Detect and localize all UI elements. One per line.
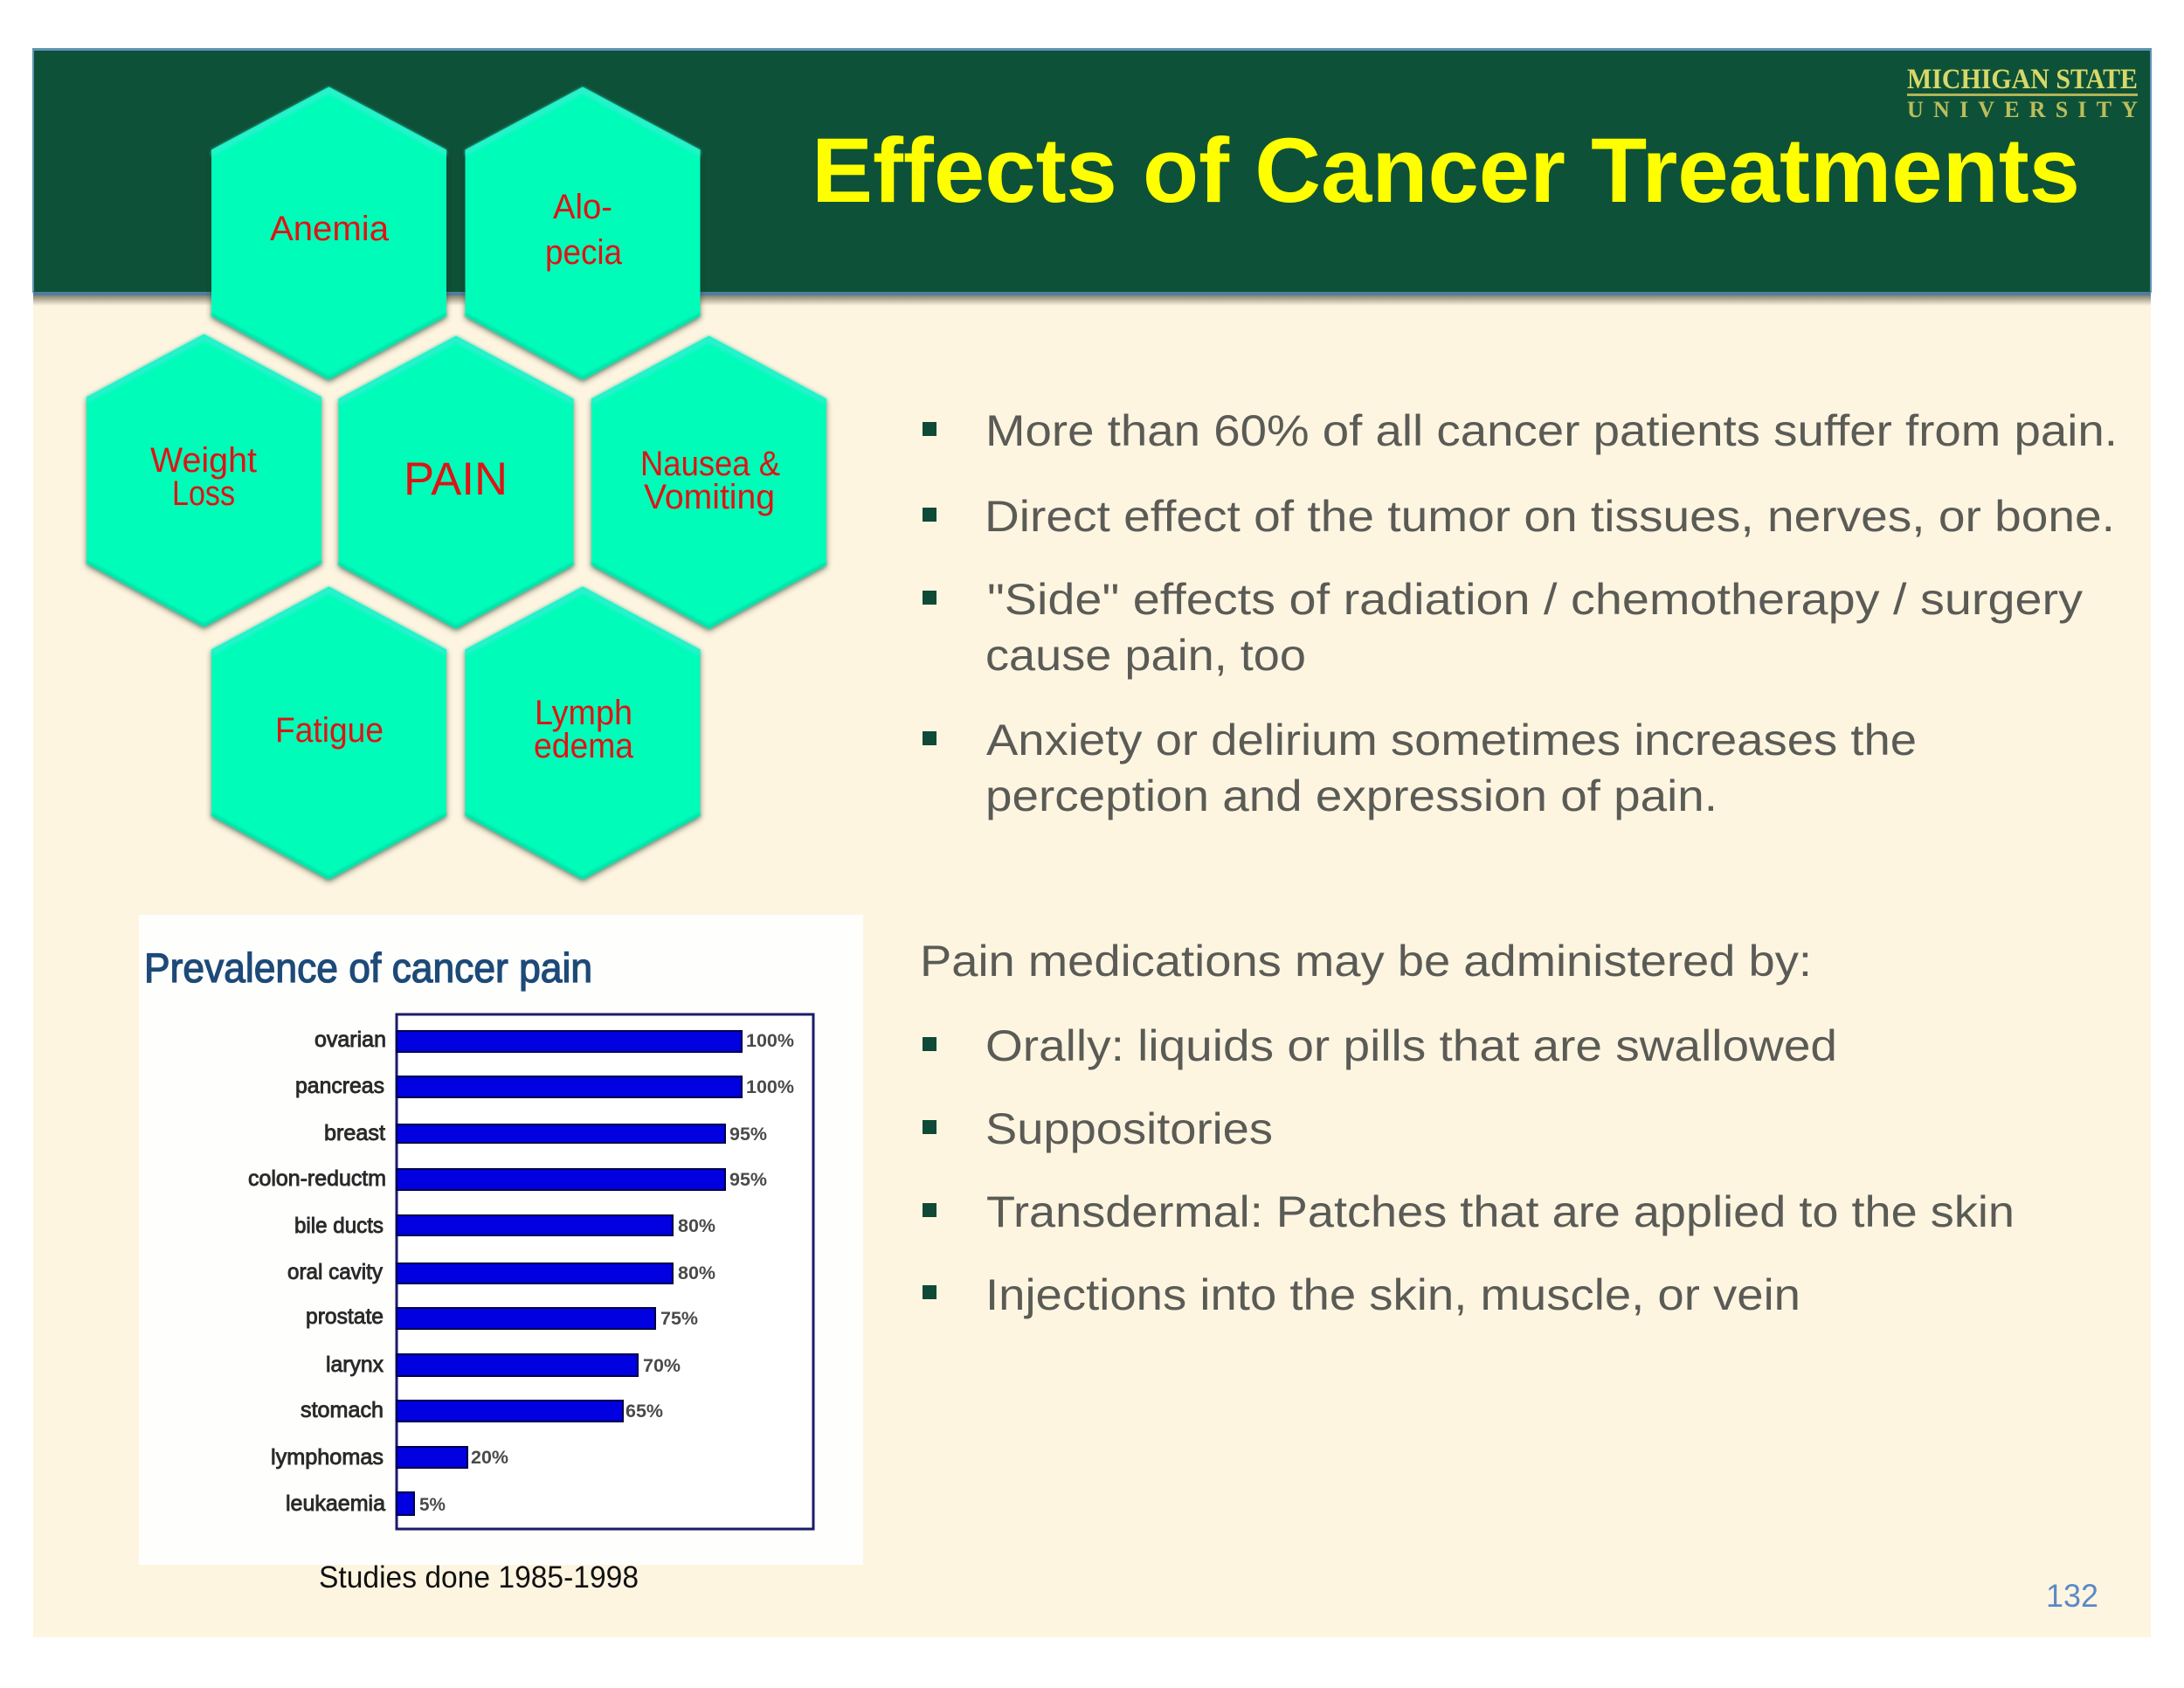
value labels: 100% — [746, 1077, 794, 1097]
value labels: 95% — [729, 1124, 767, 1145]
hexagon: Anemia — [211, 87, 446, 379]
category labels: colon-reductm — [248, 1166, 386, 1191]
medications heading: Pain medications may be administered by: — [920, 937, 1812, 986]
hexagon cluster — [86, 87, 826, 879]
bullet: side effects — [923, 575, 2083, 680]
category labels: bile ducts — [294, 1214, 384, 1238]
value labels: 5% — [419, 1495, 446, 1515]
value labels: 20% — [471, 1448, 508, 1468]
hexagon: Alopecia — [465, 87, 701, 379]
hexagon: Nausea and Vomiting — [591, 336, 826, 629]
value labels: 75% — [660, 1309, 698, 1329]
category labels: prostate — [306, 1304, 384, 1329]
category labels: breast — [324, 1121, 385, 1145]
chart caption: Studies done 1985-1998 — [319, 1560, 639, 1595]
hexagon: Anemia: Anemia — [270, 210, 390, 248]
value labels: 80% — [678, 1216, 715, 1236]
bullet: anxiety or delirium: perception and expression of pain. — [985, 771, 1717, 820]
plot frame — [397, 1014, 813, 1529]
category labels: oral cavity — [287, 1260, 383, 1284]
hexagon: Lymph edema: edema — [534, 727, 634, 765]
hexagon: Nausea and Vomiting: Vomiting — [644, 478, 775, 516]
hexagon: Alopecia: pecia — [545, 233, 623, 272]
bullet: injections: Injections into the skin, muscle, or vein — [985, 1270, 1800, 1319]
hexagon: Weight Loss: Weight — [150, 441, 257, 480]
value labels — [419, 1031, 794, 1515]
page number: 132 — [2046, 1578, 2098, 1614]
value labels: 65% — [625, 1401, 663, 1422]
logo: Michigan State University — [1907, 64, 2138, 122]
bullet: pain prevalence: More than 60% of all cancer patients suffer from pain. — [985, 406, 2118, 455]
bars — [397, 1031, 742, 1515]
chart title: Prevalence of cancer pain — [144, 944, 592, 991]
chart panel: prevalence of cancer pain — [139, 915, 863, 1565]
value labels: 95% — [729, 1170, 767, 1190]
logo: Michigan State University: MICHIGAN STATE — [1907, 64, 2138, 95]
hexagon: PAIN — [339, 336, 573, 629]
hexagon: Weight Loss — [86, 334, 321, 627]
value labels: 100% — [746, 1031, 794, 1051]
effects bullet list — [923, 406, 2118, 820]
bullet: transdermal: Transdermal: Patches that are applied to the skin — [986, 1187, 2015, 1236]
value labels: 70% — [643, 1356, 681, 1376]
hexagon: Lymph edema: Lymph — [535, 694, 632, 732]
header band — [32, 48, 2152, 306]
hexagon: Weight Loss: Loss — [172, 474, 235, 513]
category labels: ovarian — [314, 1027, 386, 1052]
bullet: anxiety or delirium: Anxiety or delirium sometimes increases the — [986, 716, 1917, 764]
hexagon: Alopecia: Alo- — [553, 188, 612, 226]
category labels: larynx — [326, 1352, 384, 1377]
hexagon: Nausea and Vomiting: Nausea & — [640, 445, 780, 483]
hexagon: PAIN: PAIN — [404, 453, 508, 505]
category labels: stomach — [301, 1398, 384, 1422]
value labels: 80% — [678, 1263, 715, 1283]
bullet: side effects: "Side" effects of radiation / chemotherapy / surgery — [987, 575, 2083, 624]
bullet: side effects: cause pain, too — [985, 631, 1306, 680]
logo: Michigan State University: UNIVERSITY — [1907, 97, 2138, 122]
medications bullet list — [923, 1021, 2015, 1319]
bullet: orally: Orally: liquids or pills that are swallowed — [985, 1021, 1837, 1070]
category labels: lymphomas — [271, 1445, 384, 1470]
bullet: suppositories: Suppositories — [985, 1104, 1273, 1153]
category labels — [248, 1027, 386, 1516]
category labels: leukaemia — [286, 1491, 385, 1516]
title: Effects of Cancer Treatments — [812, 120, 2080, 222]
hexagon: Fatigue: Fatigue — [275, 711, 384, 750]
hexagon: Fatigue — [211, 587, 446, 879]
bullet: direct effect: Direct effect of the tumor on tissues, nerves, or bone. — [985, 492, 2115, 541]
bullet: anxiety or delirium — [923, 716, 1917, 820]
hexagon: Lymph edema — [465, 587, 701, 879]
category labels: pancreas — [295, 1074, 384, 1098]
